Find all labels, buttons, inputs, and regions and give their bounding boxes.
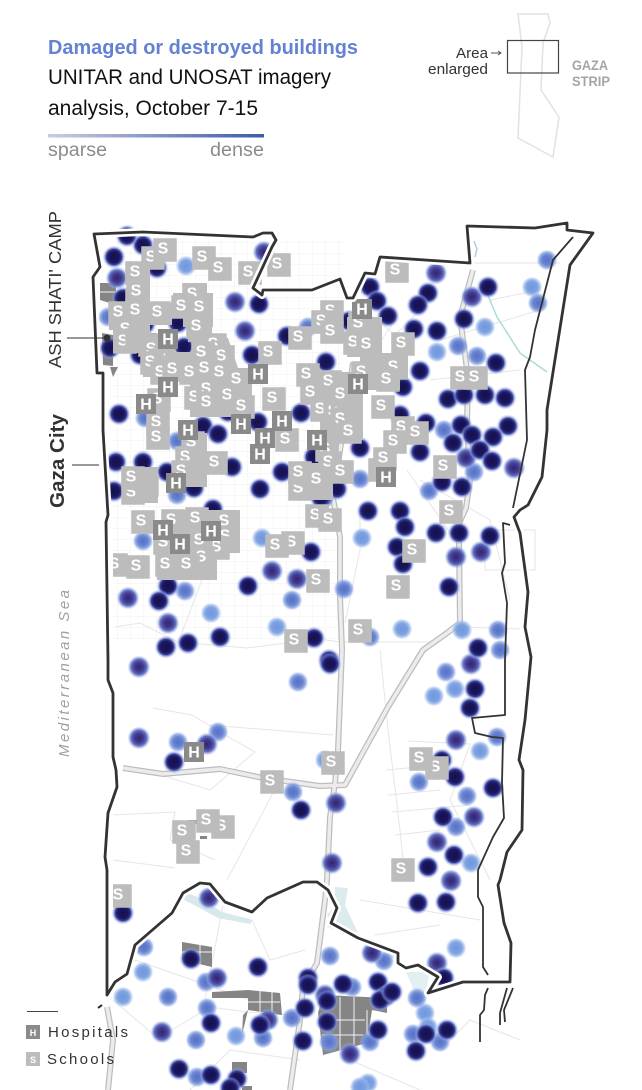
school markers: S: [335, 411, 346, 428]
school markers: S: [146, 249, 157, 266]
school markers: S: [376, 398, 387, 415]
school markers: S: [152, 304, 163, 321]
school markers: S: [438, 458, 449, 475]
school markers: S: [151, 429, 162, 446]
school markers: S: [343, 423, 354, 440]
school markers: S: [243, 264, 254, 281]
school markers: S: [181, 556, 192, 573]
title: Damaged or destroyed buildings: [48, 37, 358, 59]
school markers: S: [325, 303, 336, 320]
school markers: S: [323, 511, 334, 528]
school markers: S: [131, 283, 142, 300]
school markers: S: [167, 361, 178, 378]
dark dots: [98, 224, 520, 1090]
school markers: S: [155, 364, 166, 381]
school markers: S: [414, 750, 425, 767]
hospital markers: H: [140, 397, 152, 414]
school markers: S: [113, 887, 124, 904]
school markers: S: [311, 471, 322, 488]
school markers: S: [156, 351, 167, 368]
school markers: S: [190, 510, 201, 527]
hospital markers: H: [205, 524, 217, 541]
school markers: S: [378, 450, 389, 467]
density legend: [48, 134, 264, 161]
school markers: S: [177, 823, 188, 840]
school markers: S: [126, 469, 137, 486]
school markers: S: [180, 449, 191, 466]
school markers: S: [311, 572, 322, 589]
hospital markers: H: [182, 423, 194, 440]
hospital markers: H: [252, 367, 264, 384]
light dots: [112, 256, 542, 1090]
school markers: S: [184, 364, 195, 381]
hospital markers: H: [356, 302, 368, 319]
school markers: S: [353, 315, 364, 332]
school markers: S: [328, 403, 339, 420]
hospital markers: H: [162, 332, 174, 349]
school markers: S: [158, 241, 169, 258]
school markers: S: [320, 441, 331, 458]
school markers: S: [301, 366, 312, 383]
hospital markers: H: [311, 433, 323, 450]
school markers: S: [196, 344, 207, 361]
school markers: S: [213, 260, 224, 277]
school markers: S: [316, 313, 327, 330]
school markers: S: [293, 480, 304, 497]
school markers: S: [209, 454, 220, 471]
school markers: S: [201, 381, 212, 398]
locator map: Gaza Strip: GAZA: [572, 58, 608, 73]
hospital markers: H: [254, 447, 266, 464]
school markers: S: [305, 384, 316, 401]
hospital markers: [136, 299, 396, 762]
hospital markers: H: [352, 377, 364, 394]
subtitle: UNITAR and UNOSAT imagery: [48, 65, 331, 89]
density legend: sparse: [48, 140, 107, 161]
locator map: Gaza Strip: [428, 14, 610, 157]
school markers: S: [335, 386, 346, 403]
school markers: S: [231, 371, 242, 388]
street grid: [113, 240, 560, 1090]
locator map: Gaza Strip: enlarged: [428, 61, 488, 78]
hospital markers: H: [188, 745, 200, 762]
subtitle: analysis, October 7-15: [48, 96, 258, 120]
school markers: S: [166, 512, 177, 529]
school markers: S: [430, 759, 441, 776]
school markers: S: [201, 812, 212, 829]
school markers: S: [176, 463, 187, 480]
map legend: S: [30, 1055, 36, 1065]
map legend: H: [30, 1028, 36, 1038]
school markers: S: [455, 369, 466, 386]
school markers: S: [120, 321, 131, 338]
school markers: S: [131, 558, 142, 575]
major roads: [107, 270, 473, 1090]
school markers: S: [270, 537, 281, 554]
school markers: S: [293, 464, 304, 481]
damage density dots: [98, 224, 558, 1090]
school markers: S: [469, 369, 480, 386]
school markers: S: [118, 333, 129, 350]
school markers: S: [216, 348, 227, 365]
school markers: S: [348, 334, 359, 351]
school markers: S: [381, 371, 392, 388]
school markers: S: [315, 401, 326, 418]
school markers: S: [214, 364, 225, 381]
school markers: S: [396, 335, 407, 352]
school markers: S: [391, 578, 402, 595]
label: Ash Shati' Camp: [45, 211, 110, 368]
school markers: S: [146, 341, 157, 358]
school markers: S: [361, 336, 372, 353]
school markers: S: [196, 549, 207, 566]
school markers: S: [286, 534, 297, 551]
school markers: S: [410, 424, 421, 441]
hospital markers: H: [170, 476, 182, 493]
school markers: S: [323, 454, 334, 471]
school markers: S: [356, 364, 367, 381]
school markers: S: [444, 503, 455, 520]
school markers: S: [293, 329, 304, 346]
map legend: [26, 1012, 128, 1068]
school markers: S: [390, 262, 401, 279]
locator map: Gaza Strip: Area: [456, 45, 489, 62]
built-up areas: [100, 283, 387, 1090]
school markers: S: [176, 298, 187, 315]
school markers: S: [219, 513, 230, 530]
label: Ash Shati' Camp: ASH SHATI' CAMP: [45, 211, 65, 368]
hospital markers: H: [157, 523, 169, 540]
hospital markers: H: [380, 470, 392, 487]
school markers: S: [335, 463, 346, 480]
city boundary outline: [93, 223, 593, 1008]
school markers: S: [289, 632, 300, 649]
hospital markers: H: [174, 537, 186, 554]
school markers: S: [201, 394, 212, 411]
school markers: S: [267, 390, 278, 407]
school markers: S: [208, 336, 219, 353]
school markers: S: [197, 249, 208, 266]
label: Gaza City: Gaza City: [47, 413, 69, 508]
inner coastal line: [472, 237, 573, 1042]
school markers: S: [263, 344, 274, 361]
medium dots: [98, 250, 558, 1088]
label: Gaza City: [47, 413, 99, 508]
school markers: S: [211, 539, 222, 556]
school markers: S: [199, 360, 210, 377]
school markers: S: [152, 391, 163, 408]
school markers: S: [280, 431, 291, 448]
school markers: S: [323, 373, 334, 390]
school markers: S: [396, 861, 407, 878]
school markers: S: [388, 359, 399, 376]
school markers: S: [272, 256, 283, 273]
hospital markers: H: [259, 431, 271, 448]
school markers: S: [353, 622, 364, 639]
school markers: S: [310, 507, 321, 524]
map legend: Hospitals: [48, 1024, 128, 1041]
school markers: S: [189, 389, 200, 406]
school markers: S: [325, 323, 336, 340]
school markers: S: [191, 318, 202, 335]
school markers: S: [194, 299, 205, 316]
school markers: [104, 238, 488, 908]
school markers: S: [396, 419, 407, 436]
school markers: S: [216, 818, 227, 835]
school markers: S: [220, 528, 231, 545]
school markers: S: [130, 302, 141, 319]
school markers: S: [158, 534, 169, 551]
school markers: S: [126, 484, 137, 501]
hospital markers: H: [235, 417, 247, 434]
school markers: S: [313, 471, 324, 488]
density legend: dense: [210, 140, 264, 161]
school markers: S: [151, 414, 162, 431]
school markers: S: [186, 434, 197, 451]
school markers: S: [388, 433, 399, 450]
school markers: S: [194, 532, 205, 549]
school markers: S: [130, 264, 141, 281]
school markers: S: [407, 542, 418, 559]
label: Mediterranean Sea: Mediterranean Sea: [56, 590, 73, 757]
purple dots: [106, 240, 526, 1066]
school markers: S: [181, 843, 192, 860]
school markers: S: [187, 286, 198, 303]
school markers: S: [113, 304, 124, 321]
school markers: S: [109, 556, 120, 573]
hospital markers: H: [276, 414, 288, 431]
school markers: S: [222, 387, 233, 404]
locator map: Gaza Strip: STRIP: [572, 74, 610, 89]
school markers: S: [236, 398, 247, 415]
hospital markers: H: [162, 380, 174, 397]
water channel: [184, 241, 547, 998]
subtitle: [48, 65, 331, 120]
school markers: S: [136, 513, 147, 530]
map legend: Schools: [47, 1051, 114, 1068]
school markers: S: [265, 773, 276, 790]
school markers: S: [145, 354, 156, 371]
school markers: S: [326, 754, 337, 771]
school markers: S: [160, 556, 171, 573]
